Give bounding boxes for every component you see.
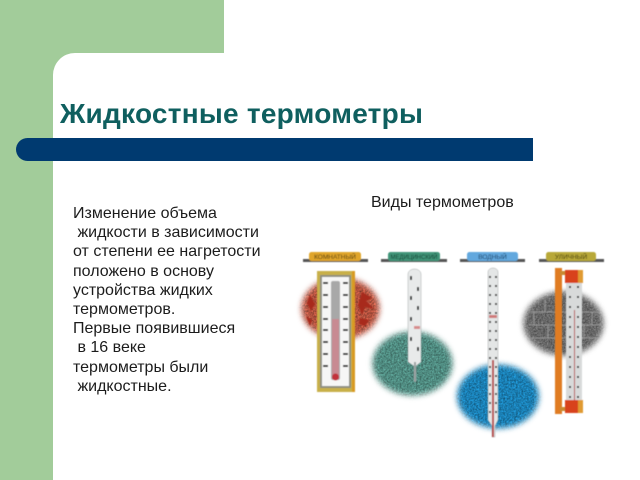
- backdrop: blue water: [460, 367, 542, 431]
- label: water: ВОДНЫЙ: [478, 252, 507, 261]
- label: medical: [381, 252, 447, 262]
- medical thermometer body: [408, 269, 421, 382]
- room thermometer body: [317, 271, 355, 392]
- backdrop: grey brick wall: [526, 294, 606, 358]
- label: room: КОМНАТНЫЙ: [314, 252, 356, 261]
- water thermometer body: [488, 268, 498, 437]
- thermometer: medical: [375, 252, 455, 398]
- title: Жидкостные термометры: [60, 98, 423, 129]
- label: street: [539, 252, 604, 262]
- street thermometer body: [555, 268, 583, 414]
- backdrop: green speckle: [375, 334, 455, 398]
- label: street: УЛИЧНЫЙ: [555, 252, 587, 261]
- thermometer: water: [460, 252, 542, 437]
- text block: description: Изменение объема жидкости в зависимости от степени ее нагретости положено в основу устройства жидких термометров. Первые появившиеся в 16 веке термометры были жидкостные.: [73, 205, 261, 395]
- thermometer: street: [526, 252, 606, 414]
- label: water: [460, 252, 525, 262]
- backdrop: red foliage: [304, 280, 382, 342]
- heading: thermometer types: Виды термометров: [371, 194, 514, 211]
- thermometer: room: [303, 252, 382, 392]
- label: medical: МЕДИЦИНСКИЙ: [391, 253, 437, 261]
- title bar: [16, 138, 533, 161]
